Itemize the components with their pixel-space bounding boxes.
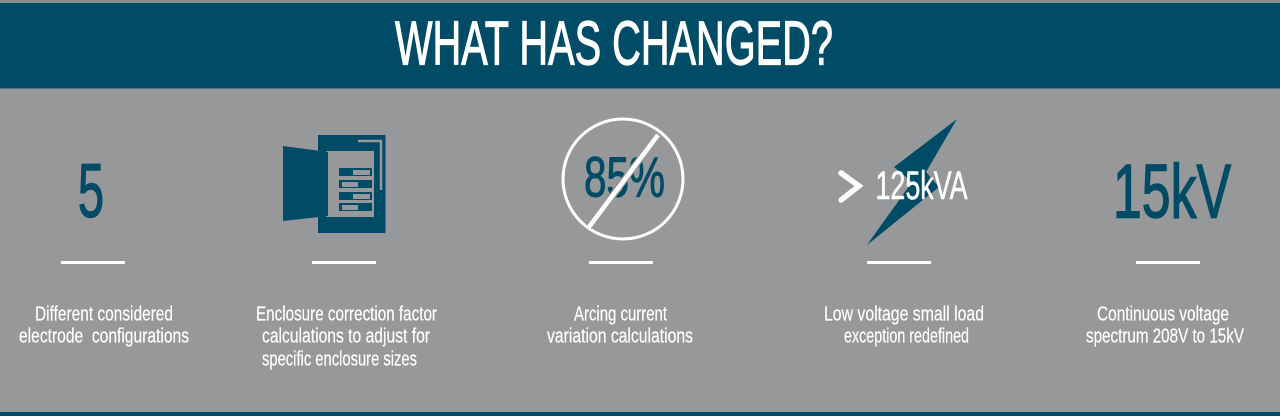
caption: enclosure correction: calculations to adjust for — [262, 326, 430, 348]
column: electrode configurations — [19, 149, 189, 348]
icon: open enclosure — [283, 135, 386, 233]
title: WHAT HAS CHANGED? — [395, 10, 833, 78]
caption: voltage spectrum — [1086, 304, 1245, 348]
column: arcing current — [547, 119, 693, 348]
caption: voltage spectrum: Continuous voltage — [1097, 304, 1229, 326]
caption: enclosure correction: Enclosure correction factor — [256, 304, 437, 326]
caption: low voltage exception: Low voltage small load — [824, 304, 984, 326]
icon: crossed-out 85%: 85% — [584, 146, 665, 210]
caption: arcing current: Arcing current — [574, 304, 667, 326]
caption: arcing current — [547, 304, 693, 348]
column: low voltage exception — [824, 119, 984, 348]
caption: low voltage exception — [824, 304, 984, 348]
caption: electrode configurations: electrode configurations — [19, 326, 189, 348]
caption: low voltage exception: exception redefined — [844, 326, 969, 348]
column: voltage spectrum — [1086, 150, 1245, 348]
caption: enclosure correction: specific enclosure sizes — [262, 348, 417, 370]
column: enclosure correction — [256, 135, 437, 370]
caption: electrode configurations: Different considered — [35, 304, 173, 326]
icon: lightning bolt with threshold — [841, 119, 968, 245]
caption: electrode configurations — [19, 304, 189, 348]
big number 5: 5 — [78, 149, 104, 234]
icon: crossed-out 85% — [563, 119, 683, 239]
caption: enclosure correction — [256, 304, 437, 370]
caption: arcing current: variation calculations — [547, 326, 693, 348]
icon: lightning bolt with threshold: 125kVA — [876, 164, 968, 208]
header banner — [0, 3, 1280, 88]
